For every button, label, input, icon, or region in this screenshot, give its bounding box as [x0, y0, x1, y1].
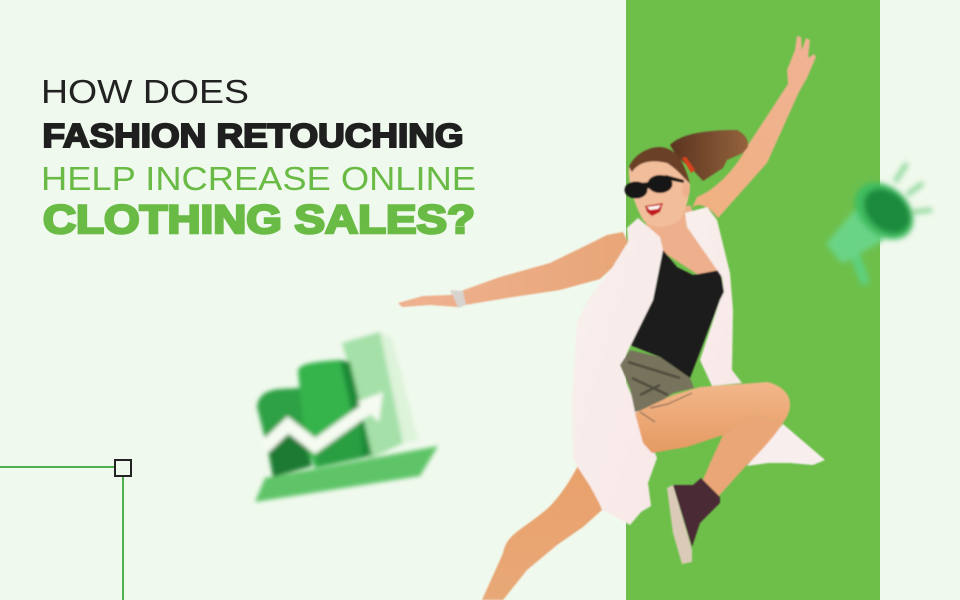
hair ribbon — [682, 157, 695, 173]
title line: how does: HOW DOES — [41, 74, 249, 111]
watch — [450, 290, 466, 308]
lips — [645, 203, 663, 216]
shirt right panel — [685, 207, 742, 386]
title line: help increase online: HELP INCREASE ONLINE — [41, 161, 476, 198]
woman jumping — [398, 36, 825, 600]
shorts — [620, 350, 694, 412]
title line: fashion retouching: FASHION RETOUCHING — [42, 117, 464, 154]
bent leg calf — [702, 415, 783, 498]
corner connector line with square node — [0, 460, 131, 600]
title — [41, 74, 476, 242]
bent leg thigh — [635, 382, 790, 453]
black top — [630, 250, 724, 378]
back leg — [482, 458, 602, 600]
icon: blurred megaphone — [826, 163, 932, 286]
head hair — [629, 147, 690, 184]
outstretched arm and hand — [398, 232, 628, 307]
title line: clothing sales: CLOTHING SALES? — [43, 198, 475, 242]
raised arm and hand — [692, 36, 816, 218]
icon: blurred growth chart — [255, 332, 438, 502]
sunglasses — [624, 175, 684, 198]
head — [629, 155, 690, 227]
ear — [682, 183, 690, 197]
thigh tattoo — [640, 393, 692, 422]
shirt left panel — [572, 218, 663, 525]
neck and chest — [645, 205, 722, 278]
green vertical panel — [626, 0, 880, 600]
shirt back tail — [747, 424, 825, 466]
shoe — [667, 478, 720, 564]
ponytail — [670, 130, 748, 181]
